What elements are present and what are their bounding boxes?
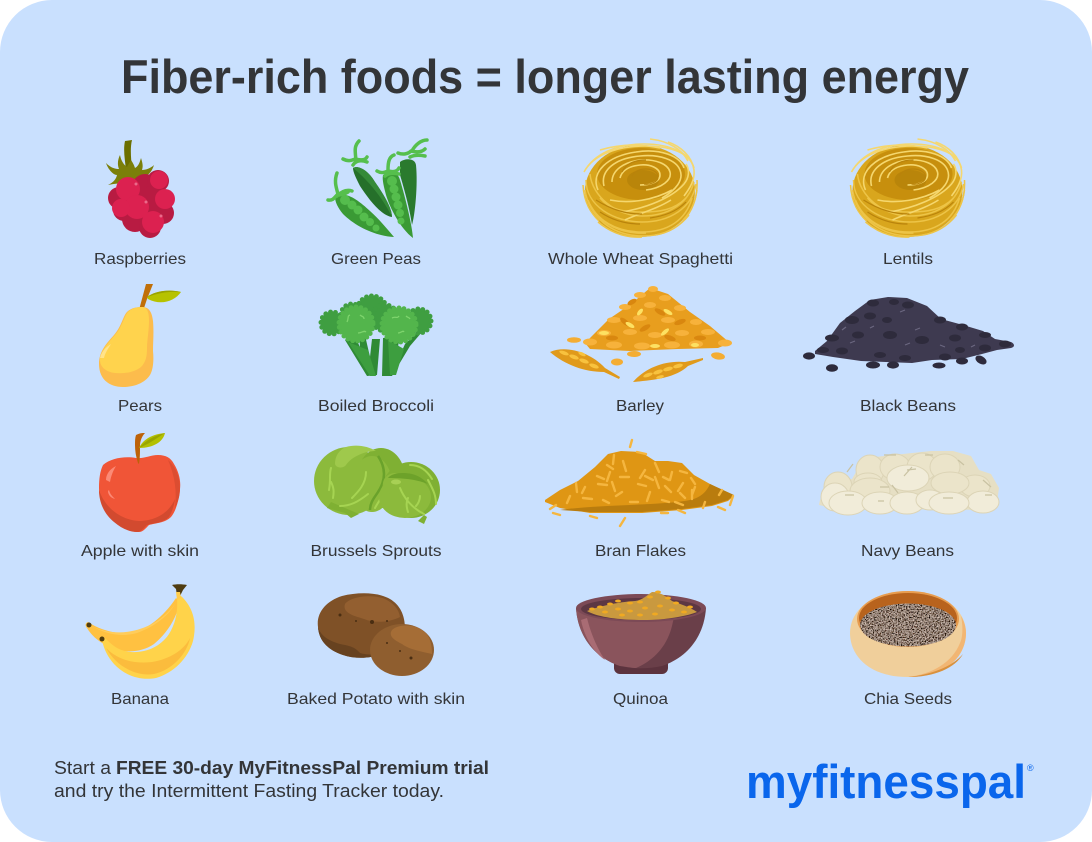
label: Raspberries: Raspberries [94,251,186,268]
icon: brussels sprouts [314,446,440,524]
icon: navy beans [819,451,999,515]
icon: left wheat ear [550,349,620,379]
label: Black Beans: Black Beans [860,398,956,415]
icon: chia seeds bowl [850,591,966,677]
label: Boiled Broccoli: Boiled Broccoli [318,398,434,415]
call to action [54,758,489,801]
label: Apple with skin: Apple with skin [81,543,199,560]
label: Baked Potato with skin: Baked Potato with skin [287,691,465,708]
label: Chia Seeds: Chia Seeds [864,691,952,708]
icon: apple [99,433,180,532]
icon: bran flakes [545,440,734,526]
label: Brussels Sprouts: Brussels Sprouts [310,543,442,560]
label: Whole Wheat Spaghetti: Whole Wheat Spaghetti [548,251,733,268]
icon: banana [86,584,195,679]
label: Banana: Banana [111,691,169,708]
label: Bran Flakes: Bran Flakes [595,543,686,560]
icon: black beans [803,297,1014,372]
logo: myfitnesspal: ® [1027,763,1034,773]
icon: right wheat ear [633,358,703,382]
logo: myfitnesspal: myfitnesspal [746,755,1026,808]
icon: broccoli [321,296,431,376]
icon: barley [550,286,732,382]
call to action: FREE 30-day MyFitnessPal Premium trial [116,758,489,778]
icon: noodle nest (spaghetti) [583,139,697,237]
call to action: and try the Intermittent Fasting Tracker today. [54,781,444,801]
label: Pears: Pears [118,398,162,415]
icon: raspberry [106,140,175,238]
label: Green Peas: Green Peas [331,251,421,268]
label: Quinoa: Quinoa [613,691,668,708]
label: Navy Beans: Navy Beans [861,543,954,560]
icon: baked potato [318,593,434,676]
label: Lentils: Lentils [883,251,933,268]
title: Fiber-rich foods = longer lasting energy [121,50,969,103]
icon: pear [99,284,181,387]
label: Barley: Barley [616,398,664,415]
icon: green peas [328,140,427,238]
icon: noodle nest (lentils) [850,139,965,237]
call to action: Start a [54,758,112,778]
icon: quinoa bowl [576,590,706,674]
